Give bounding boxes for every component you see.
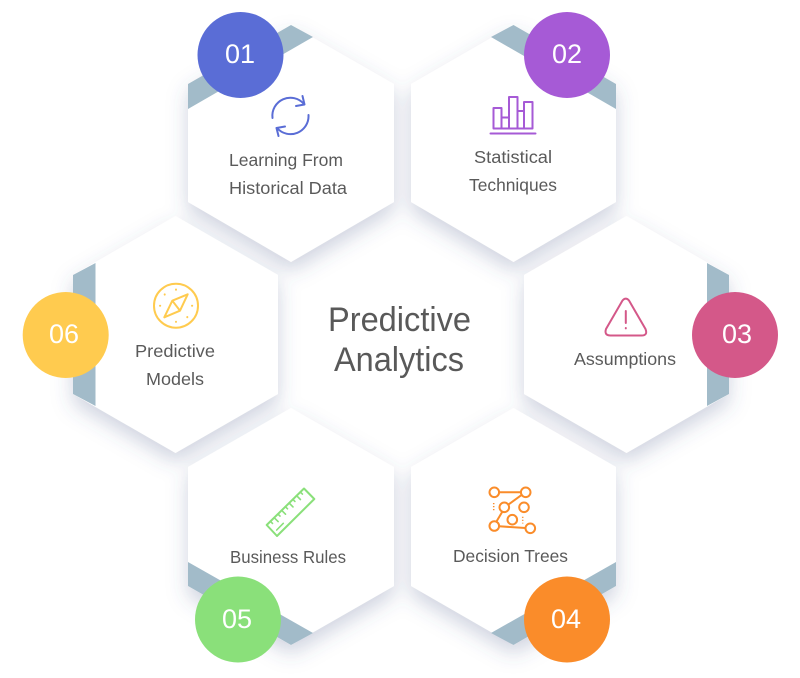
label: Historical Data <box>229 178 347 198</box>
label: Learning From <box>229 150 343 170</box>
number badge 06 <box>23 292 109 378</box>
label: Assumptions <box>574 349 676 369</box>
icon: warning triangle <box>606 299 646 336</box>
title: Predictive <box>328 301 471 339</box>
band: hexagon 6 <box>73 263 96 406</box>
panel: 03 assumptions <box>574 292 778 378</box>
label: Statistical <box>474 147 552 167</box>
hexagon layer <box>73 25 729 645</box>
panel: 02 statistical techniques <box>469 12 610 195</box>
label <box>469 147 557 195</box>
panel: 04 decision trees <box>453 488 610 662</box>
label <box>229 150 347 198</box>
band: hexagon 1 <box>188 25 313 109</box>
hexagon 1 shape <box>188 25 394 262</box>
hexagon 2 shape <box>411 25 616 262</box>
icon: ruler <box>267 488 314 536</box>
hexagon 3 shape <box>524 216 729 453</box>
title: Analytics <box>334 341 464 379</box>
band: hexagon 5 <box>188 562 313 645</box>
number badge 02: 02 <box>552 39 582 69</box>
icon: bar chart <box>490 97 536 134</box>
number badge 01: 01 <box>225 39 255 69</box>
label: Predictive <box>135 341 215 361</box>
icon: sync arrows <box>272 96 309 136</box>
label: Models <box>146 369 204 389</box>
number badge 02 <box>524 12 610 98</box>
label: Decision Trees <box>453 546 568 566</box>
hexagon 4 shape <box>411 408 616 645</box>
label <box>135 341 215 389</box>
panel: 06 predictive models <box>23 284 215 389</box>
band: hexagon 2 <box>491 25 616 109</box>
hexagon 6 shape <box>73 216 278 453</box>
number badge 05: 05 <box>222 604 252 634</box>
number badge 03 <box>692 292 778 378</box>
label: Business Rules <box>230 547 346 567</box>
band: hexagon 4 <box>491 562 616 645</box>
number badge 04: 04 <box>551 604 581 634</box>
number badge 04 <box>524 576 610 662</box>
panel: 05 business rules <box>195 488 346 662</box>
number badge 03: 03 <box>722 319 752 349</box>
number badge 05 <box>195 576 281 662</box>
icon: decision tree nodes <box>490 488 535 533</box>
number badge 01 <box>198 12 284 98</box>
panel: 01 learning from historical data <box>198 12 347 198</box>
band: hexagon 3 <box>707 263 729 406</box>
hexagon 5 shape <box>188 408 394 645</box>
icon: compass <box>154 284 198 328</box>
number badge 06: 06 <box>49 319 79 349</box>
label: Techniques <box>469 175 557 195</box>
title <box>328 301 471 379</box>
